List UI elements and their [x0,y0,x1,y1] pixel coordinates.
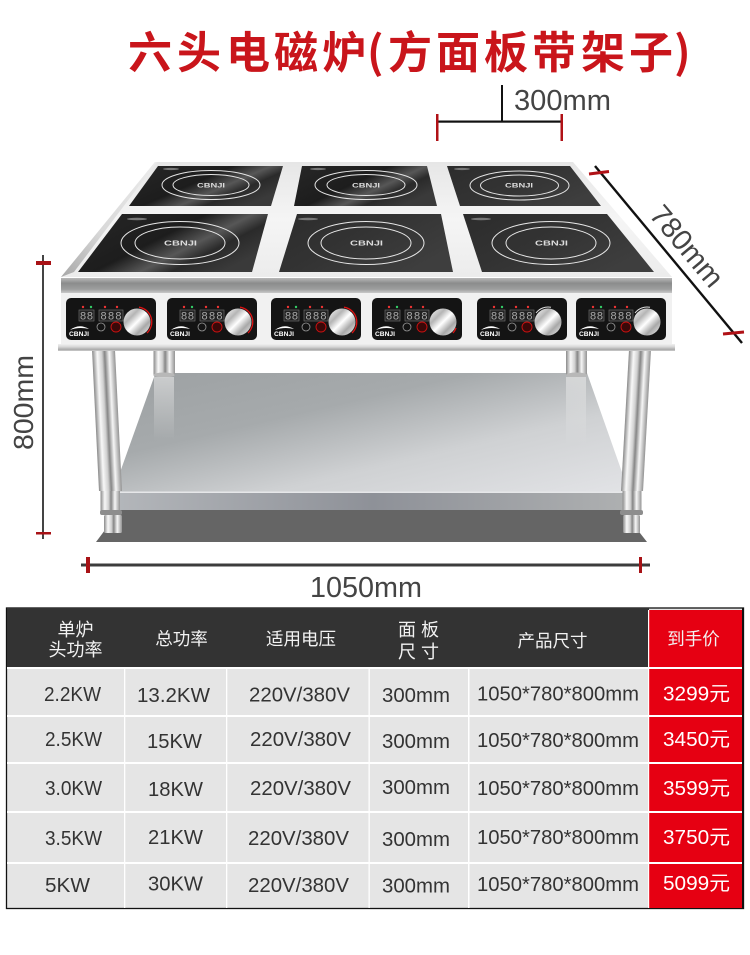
front left leg [92,350,122,533]
row: 3.0KW: 18KW [148,779,203,801]
table grid lines [7,610,742,908]
specification table [6,608,744,909]
control panel 2: 888 [202,310,222,322]
row: 2.5KW: 300mm [382,731,450,753]
control panel 6: 888 [610,310,632,322]
control panel 1: 888 [100,310,122,322]
table header row: 总功率 [155,629,208,649]
row: 2.2KW: 2.2KW [44,684,101,706]
row: 3.5KW: 3750元 [663,827,730,849]
control panel 4: 88 [386,310,399,322]
burner: front right [463,214,654,272]
table lip [58,344,675,351]
title: 六头电磁炉(方面板带架子) [128,17,691,81]
dimension: 1050mm width [81,557,650,604]
dimension: 1050mm width: 1050mm [310,572,422,604]
row: 2.2KW: 220V/380V [249,684,351,706]
burner: front right: CBNJI [535,240,568,248]
table header row: 面 板 [398,620,439,640]
row: 3.5KW: 3.5KW [45,828,102,850]
six-burner induction cooker on stand [58,162,675,542]
floor shadow [96,510,647,542]
table right border [742,608,744,909]
burner: back left: CBNJI [197,184,225,190]
dimension: 300mm burner width: 300mm [514,85,611,117]
row: 3.0KW: 1050*780*800mm [477,778,639,800]
control panel 2 [167,298,257,340]
row: 2.2KW: 3299元 [663,684,730,706]
stainless table top [61,162,672,277]
row: 2.2KW [44,684,730,707]
dimension: 800mm height: 800mm [8,355,39,450]
front right leg [620,350,651,533]
dimension: 780mm depth [589,166,744,343]
table header row [7,608,742,667]
control panel 6: CBNJI [579,331,599,338]
front apron [61,278,672,293]
control panel 1: CBNJI [69,331,89,338]
row: 2.2KW: 300mm [382,685,450,707]
row: 3.5KW: 1050*780*800mm [477,827,639,849]
row: 2.5KW: 220V/380V [250,729,352,751]
control panel 3: 888 [306,310,326,322]
dimension: 800mm height [8,255,51,539]
control panel 2: CBNJI [170,331,190,338]
dimension: 780mm depth: 780mm [643,199,730,294]
burner: front middle: CBNJI [350,240,383,248]
control panel 5: CBNJI [480,331,500,338]
row: 2.5KW: 1050*780*800mm [477,730,639,752]
control panel 5 [477,298,567,340]
row: 3.0KW [45,777,730,801]
row: 3.5KW: 21KW [148,827,203,849]
row: 5KW: 5KW [45,875,90,897]
row: 5KW [45,873,730,898]
row: 2.5KW: 3450元 [663,729,730,751]
row: 2.5KW: 2.5KW [45,729,102,751]
burner: front middle [279,214,453,272]
rear legs [153,350,587,445]
price column [649,668,742,908]
table header row: 单炉 [58,620,94,640]
burner: back middle [294,166,437,206]
row: 3.0KW: 3.0KW [45,778,102,800]
control panel 4: CBNJI [375,331,395,338]
row: 5KW: 300mm [382,876,450,898]
table header row: 适用电压 [266,629,336,649]
table header row: 头功率 [48,640,102,660]
control panel 1 [66,298,156,340]
row: 5KW: 30KW [148,874,203,896]
control panel 6: 88 [590,310,603,322]
table header row: 到手价 [667,629,720,649]
control panel 2: 88 [181,310,194,322]
row: 5KW: 220V/380V [248,875,350,897]
table header row: 产品尺寸 [518,631,588,651]
row: 2.2KW: 13.2KW [137,685,210,707]
burner: back right: CBNJI [505,184,533,190]
control panel 3: 88 [285,310,298,322]
burner: front left: CBNJI [164,240,197,248]
control panel 5: 888 [512,310,532,322]
control panel 5: 88 [491,310,504,322]
control panel 1: 88 [80,310,93,322]
table frame [6,608,744,908]
burner: back left [129,166,283,206]
lower shelf [113,373,629,510]
control panel 3: CBNJI [274,331,294,338]
left bevel of table top [61,162,157,277]
row: 3.5KW: 300mm [382,829,450,851]
row: 2.5KW [45,729,730,753]
burner: back right [447,166,601,206]
row: 3.0KW: 3599元 [663,778,730,800]
control panel 4 [372,298,462,340]
row: 5KW: 5099元 [663,873,730,895]
row: 3.0KW: 300mm [382,777,450,799]
row: 2.5KW: 15KW [147,731,202,753]
row: 5KW: 1050*780*800mm [477,874,639,896]
burner: front left [78,214,268,272]
control panel body [61,293,672,345]
row: 2.2KW: 1050*780*800mm [477,684,639,706]
row: 3.0KW: 220V/380V [250,778,352,800]
table header row: 尺 寸 [398,642,439,662]
control panel 6 [576,298,666,340]
control panel 3 [271,298,361,340]
row: 3.5KW [45,827,730,851]
control panel 4: 888 [406,310,428,322]
burner: back middle: CBNJI [352,184,380,190]
row: 3.5KW: 220V/380V [248,828,350,850]
